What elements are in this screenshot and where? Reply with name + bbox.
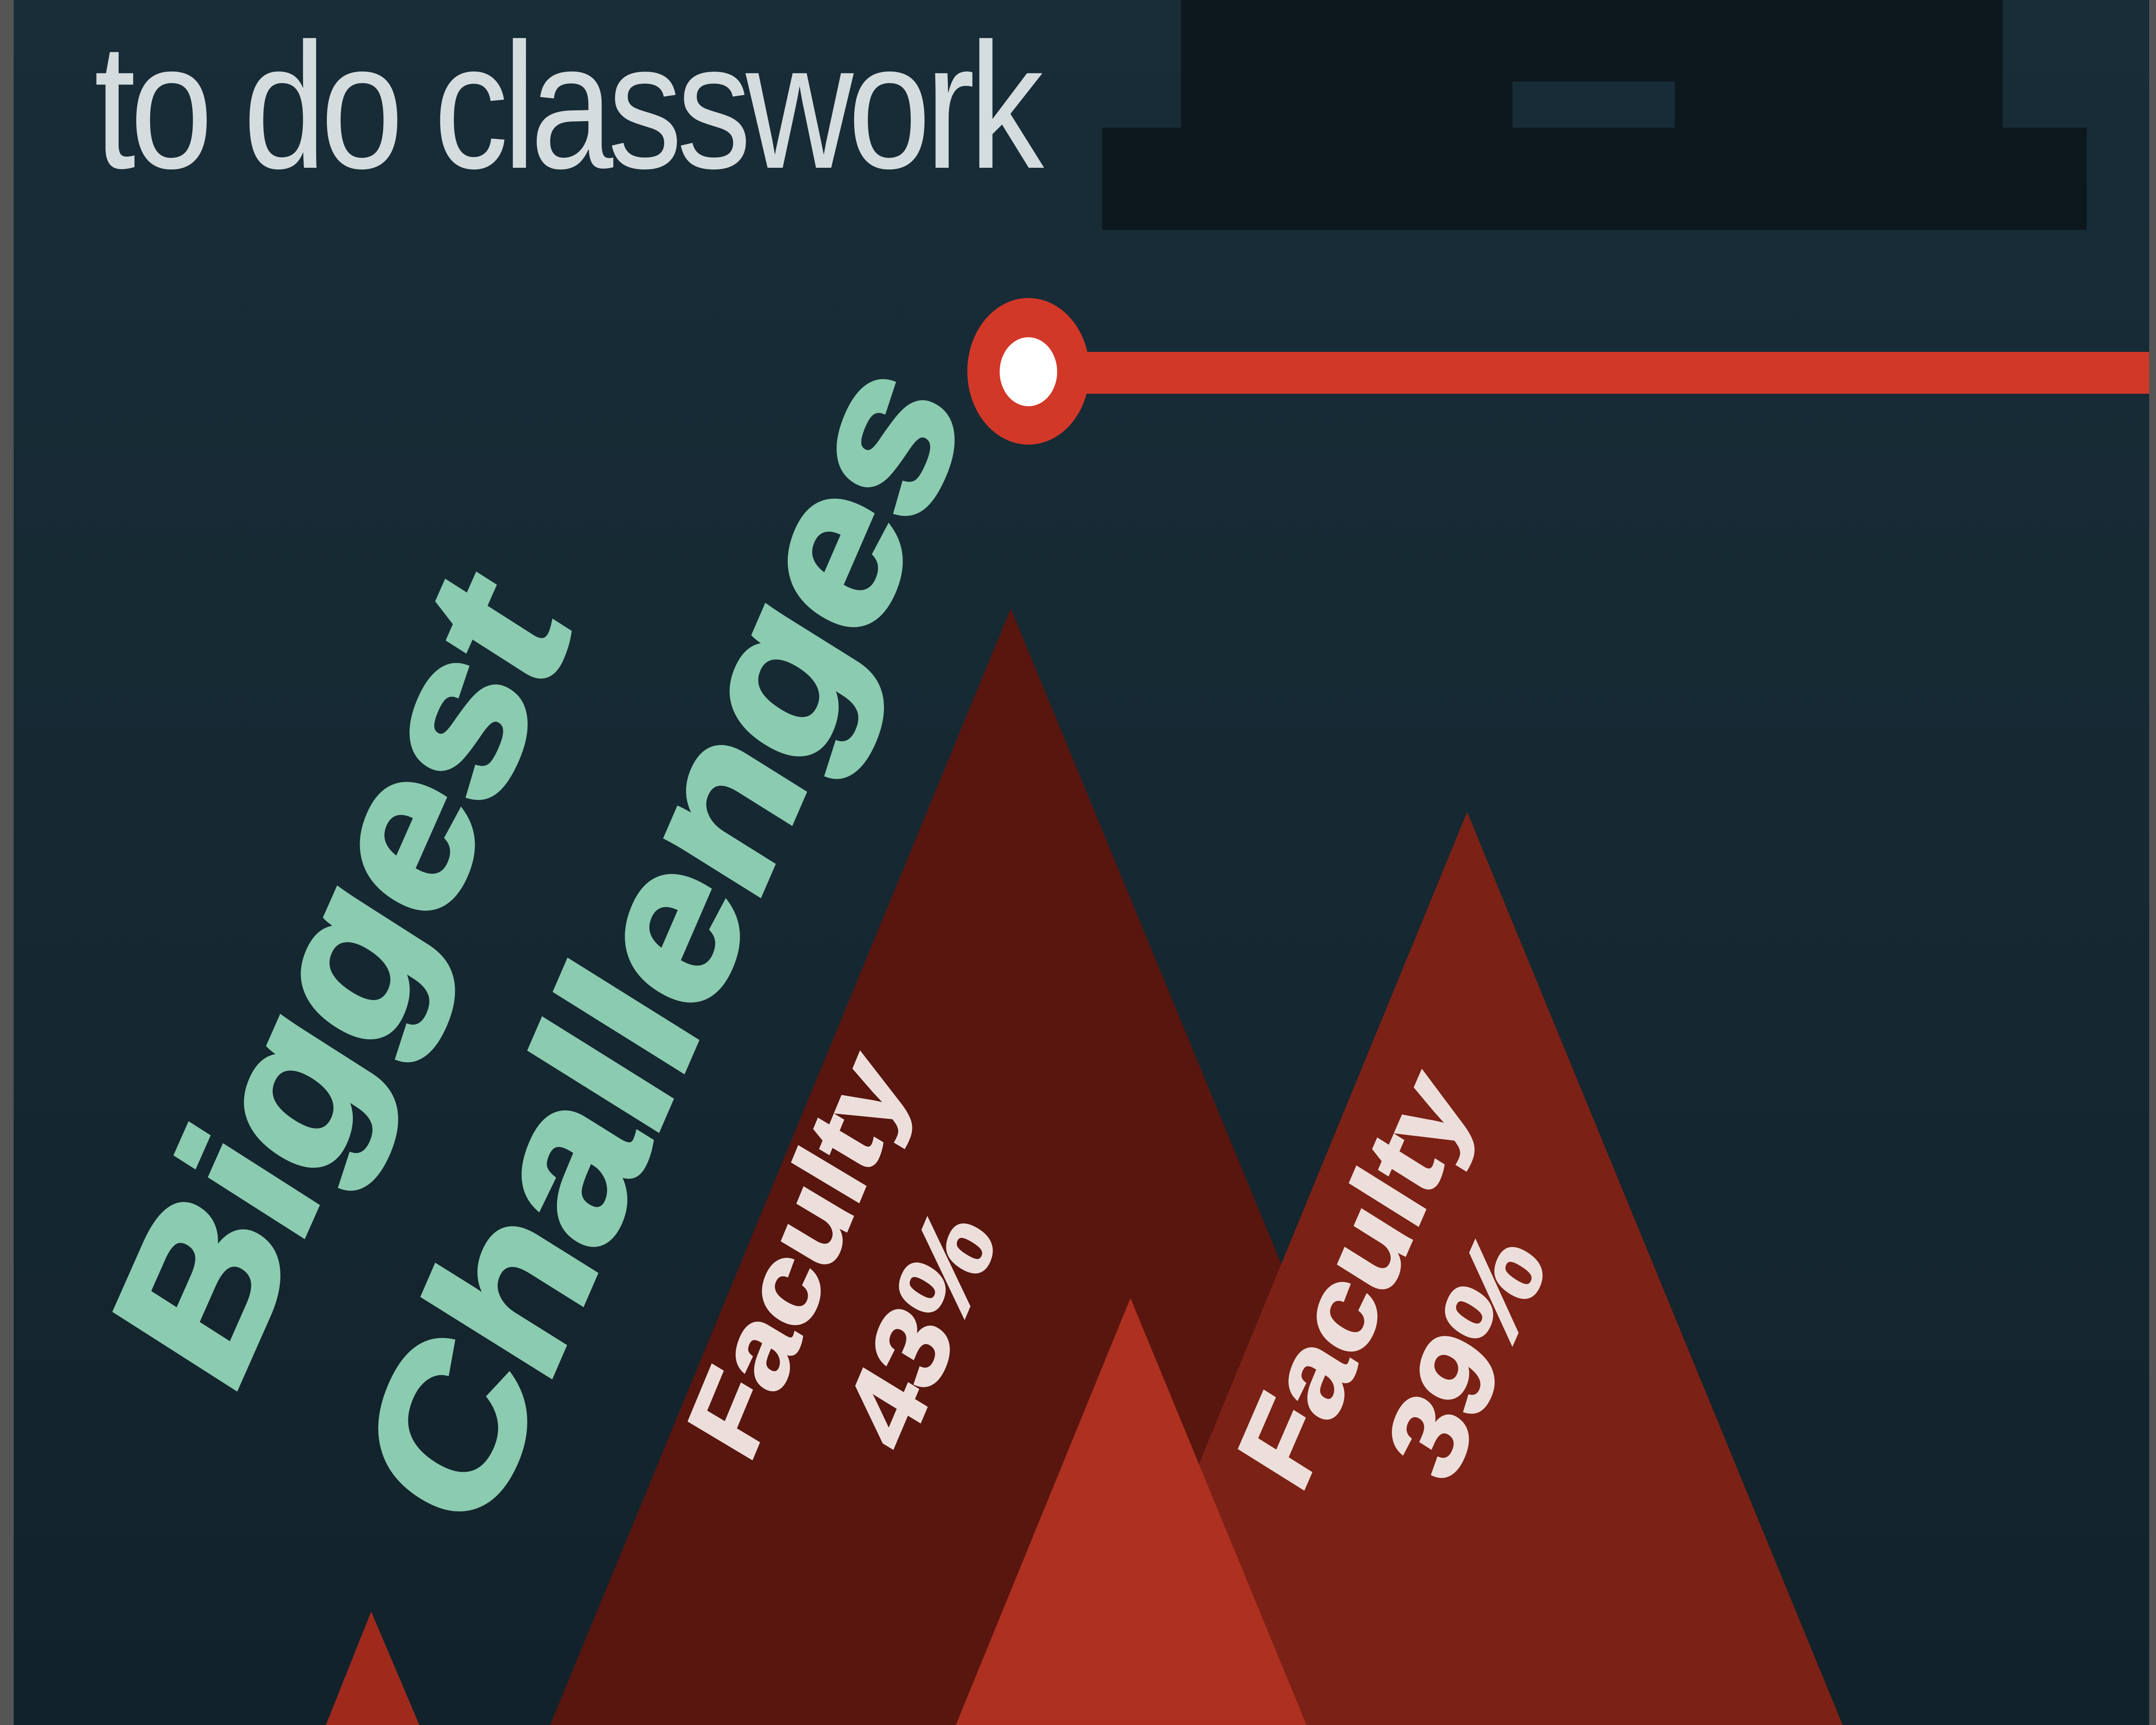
label: Faculty 39%: 39% bbox=[1364, 1209, 1568, 1501]
chart: triangle 43% faculty bbox=[550, 608, 1471, 1725]
icon: dark device base bbox=[1102, 0, 2087, 230]
chart: triangle 39% faculty bbox=[1092, 812, 1843, 1725]
text: to do classwork: to do classwork bbox=[94, 6, 1046, 206]
label: Faculty 39%: Faculty bbox=[1216, 1048, 1493, 1509]
heading: Biggest Challenges: Biggest bbox=[72, 530, 610, 1426]
heading: Biggest Challenges: Challenges bbox=[320, 317, 1006, 1567]
chart: front red triangle bbox=[956, 1298, 1307, 1725]
label: Faculty 43%: 43% bbox=[823, 1188, 1018, 1470]
label: Faculty 43%: Faculty bbox=[666, 1031, 929, 1478]
chart: small red triangle bbox=[326, 1612, 419, 1725]
section marker line with dot bbox=[967, 298, 2149, 445]
